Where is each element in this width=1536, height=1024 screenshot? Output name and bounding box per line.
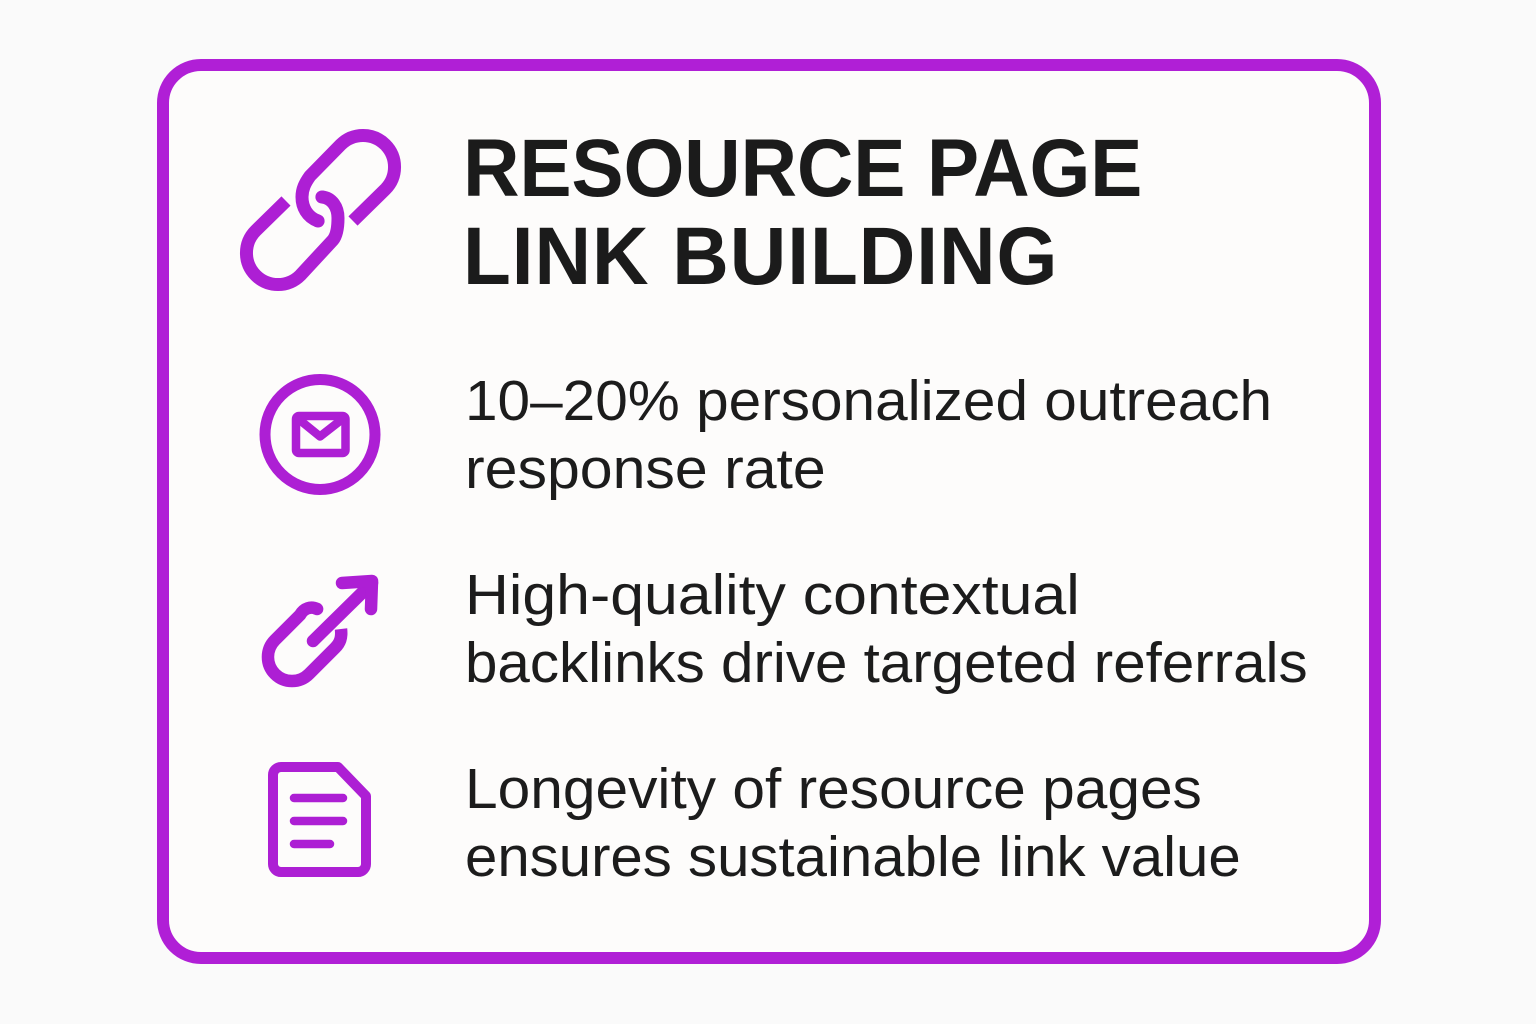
panel: card bbox=[157, 59, 1381, 964]
text: longevity bbox=[465, 757, 1241, 889]
text: response rate bbox=[465, 369, 1272, 501]
text: response rate: 10–20% personalized outreach bbox=[465, 369, 1272, 433]
icon: envelope circle bbox=[265, 380, 375, 490]
text: longevity: Longevity of resource pages bbox=[465, 757, 1202, 821]
title: RESOURCE PAGE bbox=[463, 123, 1142, 214]
text: longevity: ensures sustainable link value bbox=[465, 825, 1241, 889]
text: backlinks: backlinks drive targeted referrals bbox=[465, 631, 1308, 695]
title: LINK BUILDING bbox=[463, 211, 1058, 302]
text: backlinks: High-quality contextual bbox=[465, 563, 1080, 627]
icon: link arrow bbox=[268, 581, 372, 681]
icon: document bbox=[273, 767, 366, 872]
text: backlinks bbox=[465, 563, 1308, 695]
title bbox=[463, 123, 1142, 302]
text: response rate: response rate bbox=[465, 437, 826, 501]
icon: chain link bbox=[246, 135, 395, 285]
